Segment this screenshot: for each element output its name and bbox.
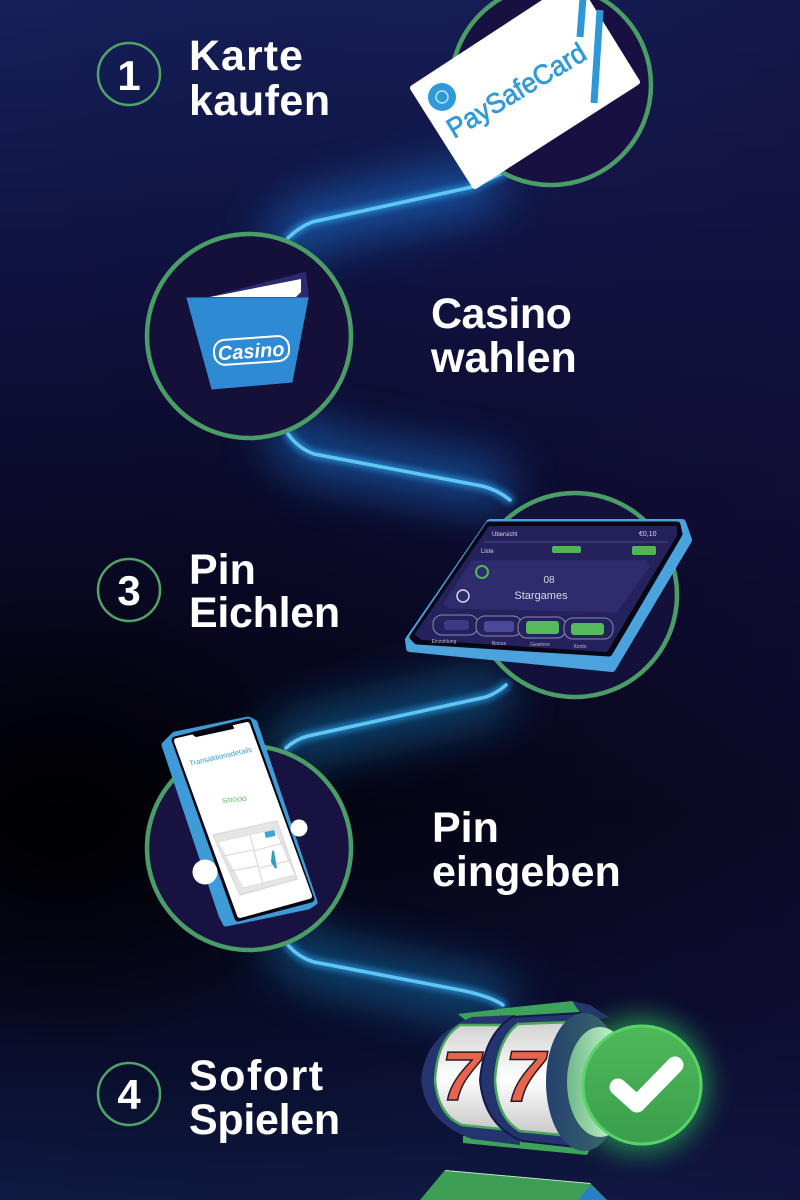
reel end cap bbox=[546, 1013, 633, 1151]
tablet: Ubersicht bbox=[492, 532, 518, 538]
connector: step 3 to step 4 bbox=[286, 685, 506, 748]
base of slot machine bbox=[420, 1170, 607, 1200]
tablet: 08 bbox=[543, 575, 555, 586]
step 5: number badge bbox=[98, 1063, 160, 1125]
step 4: heading: Pin bbox=[432, 804, 499, 852]
white dot left bbox=[192, 860, 218, 884]
step 2: book illustration bbox=[147, 234, 351, 438]
green strips bbox=[458, 1001, 610, 1155]
tablet: Liste bbox=[481, 549, 494, 555]
reel 2: 7 bbox=[505, 1037, 548, 1117]
step 3: number badge: 3 bbox=[117, 567, 141, 614]
step 2: heading: Casino bbox=[431, 290, 571, 338]
circle: step 4 bbox=[147, 746, 351, 950]
tablet bbox=[409, 523, 688, 668]
step 1: card illustration bbox=[413, 0, 651, 186]
circle: step 1 bbox=[451, 0, 651, 185]
circle: step 3 bbox=[473, 493, 677, 697]
tablet: Gewinne bbox=[530, 642, 550, 648]
white dot right bbox=[290, 820, 308, 836]
reel 2 bbox=[480, 1013, 585, 1148]
step 4: phone illustration bbox=[147, 720, 351, 950]
paysafecard: PaySafeCard bbox=[441, 37, 592, 144]
tablet: Bonus bbox=[492, 641, 507, 647]
smartphone: Transaktionsdetails bbox=[188, 745, 253, 768]
step 1: number badge: 1 bbox=[117, 52, 141, 99]
booklet bbox=[187, 273, 308, 389]
step 5: heading: Sofort bbox=[189, 1052, 325, 1100]
step 5: number badge: 4 bbox=[117, 1071, 141, 1118]
booklet: Casino bbox=[217, 339, 285, 365]
check badge bbox=[583, 1026, 701, 1144]
tablet: Einzahlung bbox=[432, 639, 457, 645]
connector: step 2 to step 3 bbox=[288, 434, 510, 500]
step 3: heading: Eichlen bbox=[189, 589, 340, 637]
green glow bbox=[572, 1017, 708, 1153]
step 1: heading: kaufen bbox=[189, 77, 331, 125]
tablet: Stargames bbox=[514, 590, 568, 602]
step 2: heading: wahlen bbox=[430, 334, 577, 382]
step 5: slot machine with check bbox=[421, 1001, 708, 1155]
step 1: number badge bbox=[98, 43, 160, 105]
step 3: tablet illustration bbox=[409, 493, 688, 697]
circle: step 2 bbox=[147, 234, 351, 438]
step 3: heading: Pin bbox=[189, 546, 256, 594]
smartphone: S0000 bbox=[222, 796, 248, 805]
smartphone bbox=[165, 720, 314, 923]
reel 1 bbox=[421, 1015, 520, 1145]
connector: step 4 to step 5 bbox=[288, 945, 503, 1005]
reel 1: 7 bbox=[442, 1037, 484, 1115]
step 4: heading: eingeben bbox=[432, 848, 621, 896]
step 3: number badge bbox=[98, 559, 160, 621]
step 1: heading: Karte bbox=[189, 32, 304, 80]
tablet: €0,10 bbox=[639, 531, 657, 538]
paysafecard bbox=[413, 0, 637, 186]
connector: step 1 to step 2 bbox=[288, 172, 505, 240]
tablet: Konto bbox=[573, 644, 587, 650]
step 5: heading: Spielen bbox=[189, 1096, 340, 1144]
